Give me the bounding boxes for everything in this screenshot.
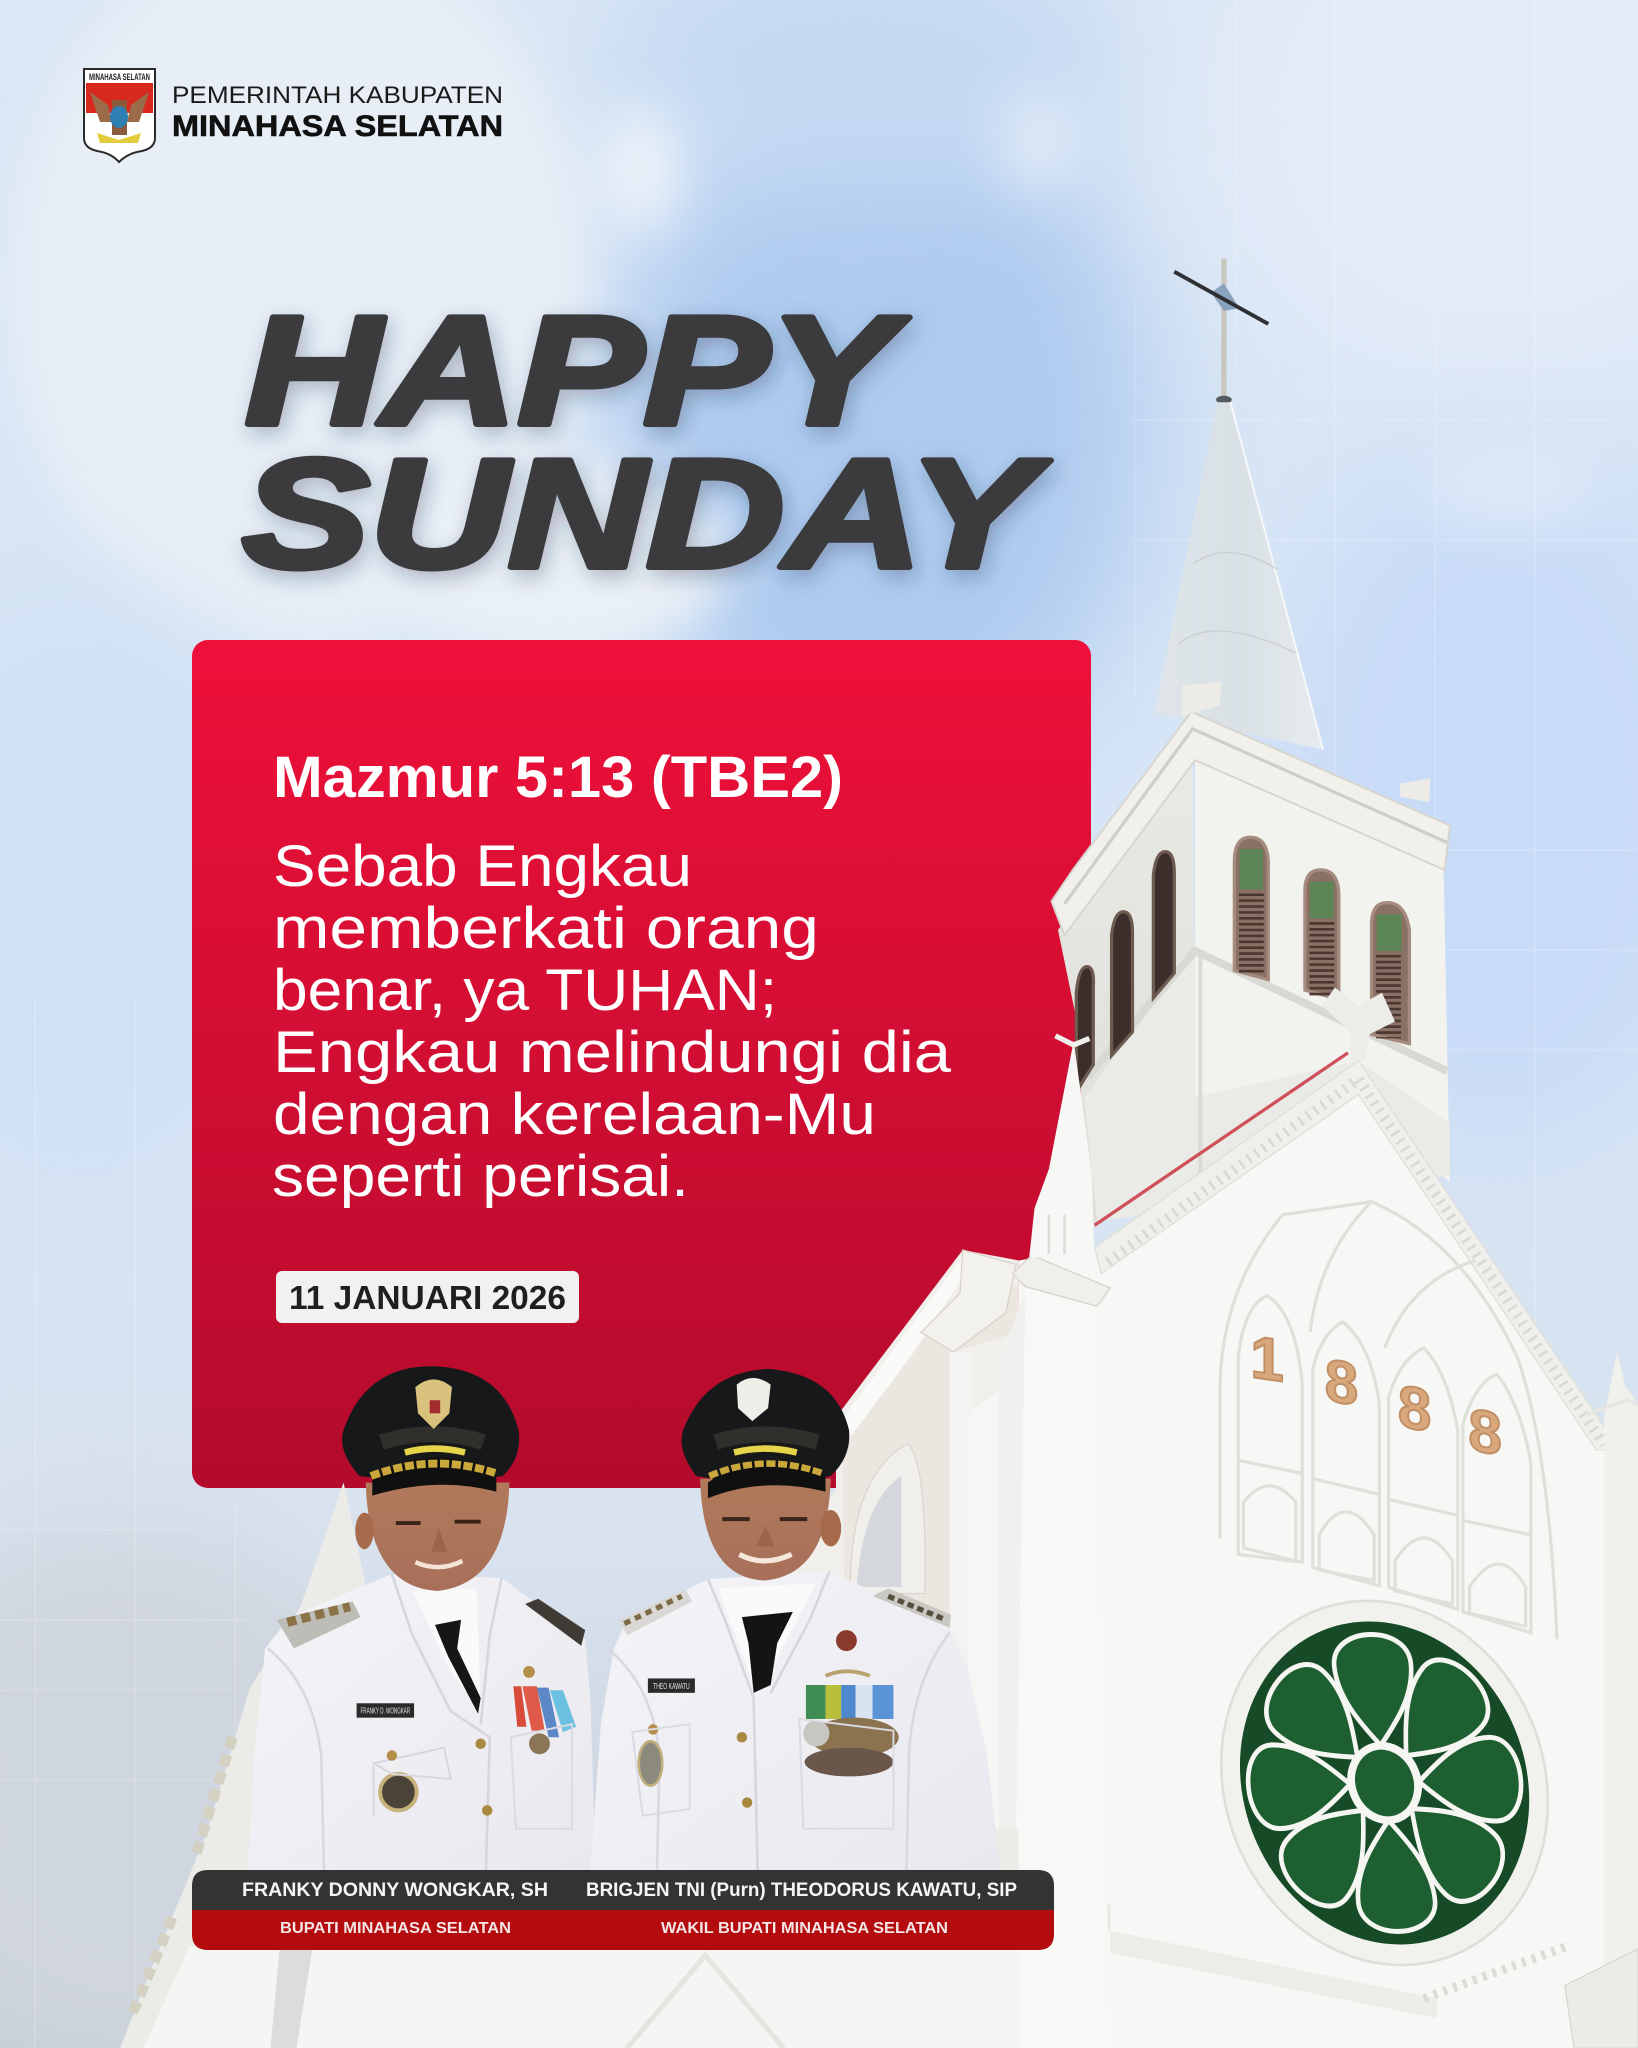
- verse text: seperti perisai.: [272, 1144, 689, 1209]
- side wing wall: [601, 1250, 1019, 2048]
- main title: happy sunday: HAPPY: [245, 284, 910, 457]
- icon: regency shield: [84, 69, 155, 162]
- 1888 numerals: 1: [1250, 1322, 1284, 1395]
- main title: happy sunday: [242, 284, 1052, 600]
- portraits of officials: [248, 1366, 1001, 1870]
- lower moulding: [1055, 1891, 1567, 2018]
- gable front wall: [1019, 987, 1638, 2048]
- portrait: franky donny wongkar: [248, 1366, 596, 1870]
- verse text: [272, 834, 952, 1209]
- names and titles bar: BUPATI MINAHASA SELATAN: [280, 1920, 511, 1937]
- date pill: 11 JANUARI 2026: [289, 1279, 566, 1316]
- main title: happy sunday: SUNDAY: [242, 427, 1052, 600]
- gothic arch relief: [1220, 1202, 1557, 1639]
- verse text: memberkati orang: [273, 896, 819, 961]
- names and titles bar: [192, 1870, 1054, 1950]
- name plate and decorations: [648, 1678, 695, 1693]
- verse text: Engkau melindungi dia: [273, 1020, 952, 1085]
- 1888 numerals: 8: [1398, 1371, 1431, 1445]
- logo and government name: [84, 69, 503, 162]
- corner pilaster: [999, 1255, 1110, 2048]
- small pinnacle: [1029, 1036, 1095, 1270]
- logo and government name: MINAHASA SELATAN: [172, 110, 503, 143]
- tower windows: [1076, 837, 1409, 1092]
- right pinnacle: [1565, 1352, 1638, 2048]
- names and titles bar: FRANKY DONNY WONGKAR, SH: [242, 1880, 548, 1901]
- bell tower: [1051, 682, 1450, 1228]
- 1888 numerals: [1250, 1322, 1502, 1468]
- red verse panel: [192, 640, 1091, 1488]
- name plate and decorations: [357, 1703, 414, 1718]
- logo and government name: PEMERINTAH KABUPATEN: [172, 82, 503, 109]
- verse text: dengan kerelaan-Mu: [273, 1082, 876, 1147]
- red roof edge: [1095, 1053, 1348, 1225]
- spire: [1155, 402, 1323, 750]
- epaulets: [277, 1601, 361, 1648]
- date pill: [276, 1271, 579, 1323]
- names and titles bar: BRIGJEN TNI (Purn) THEODORUS KAWATU, SIP: [586, 1880, 1017, 1901]
- portrait: franky donny wongkar: FRANKY D. WONGKAR: [361, 1706, 410, 1716]
- epaulets: [619, 1590, 692, 1635]
- names and titles bar: WAKIL BUPATI MINAHASA SELATAN: [661, 1920, 948, 1937]
- lower left church roofline: [120, 1483, 1019, 2048]
- rose window: [1220, 1600, 1549, 1966]
- 1888 numerals: 8: [1468, 1395, 1502, 1468]
- portrait: theodorus kawatu: [590, 1369, 1001, 1870]
- 1888 numerals: 8: [1325, 1345, 1358, 1419]
- verse text: Sebab Engkau: [273, 834, 692, 899]
- verse reference heading: Mazmur 5:13 (TBE2): [273, 745, 843, 810]
- portrait: theodorus kawatu: THEO KAWATU: [653, 1681, 690, 1691]
- arched side window: [850, 1443, 925, 1594]
- verse text: benar, ya TUHAN;: [273, 958, 777, 1023]
- cross on spire: [1174, 259, 1268, 404]
- icon: regency shield: MINAHASA SELATAN: [89, 72, 150, 82]
